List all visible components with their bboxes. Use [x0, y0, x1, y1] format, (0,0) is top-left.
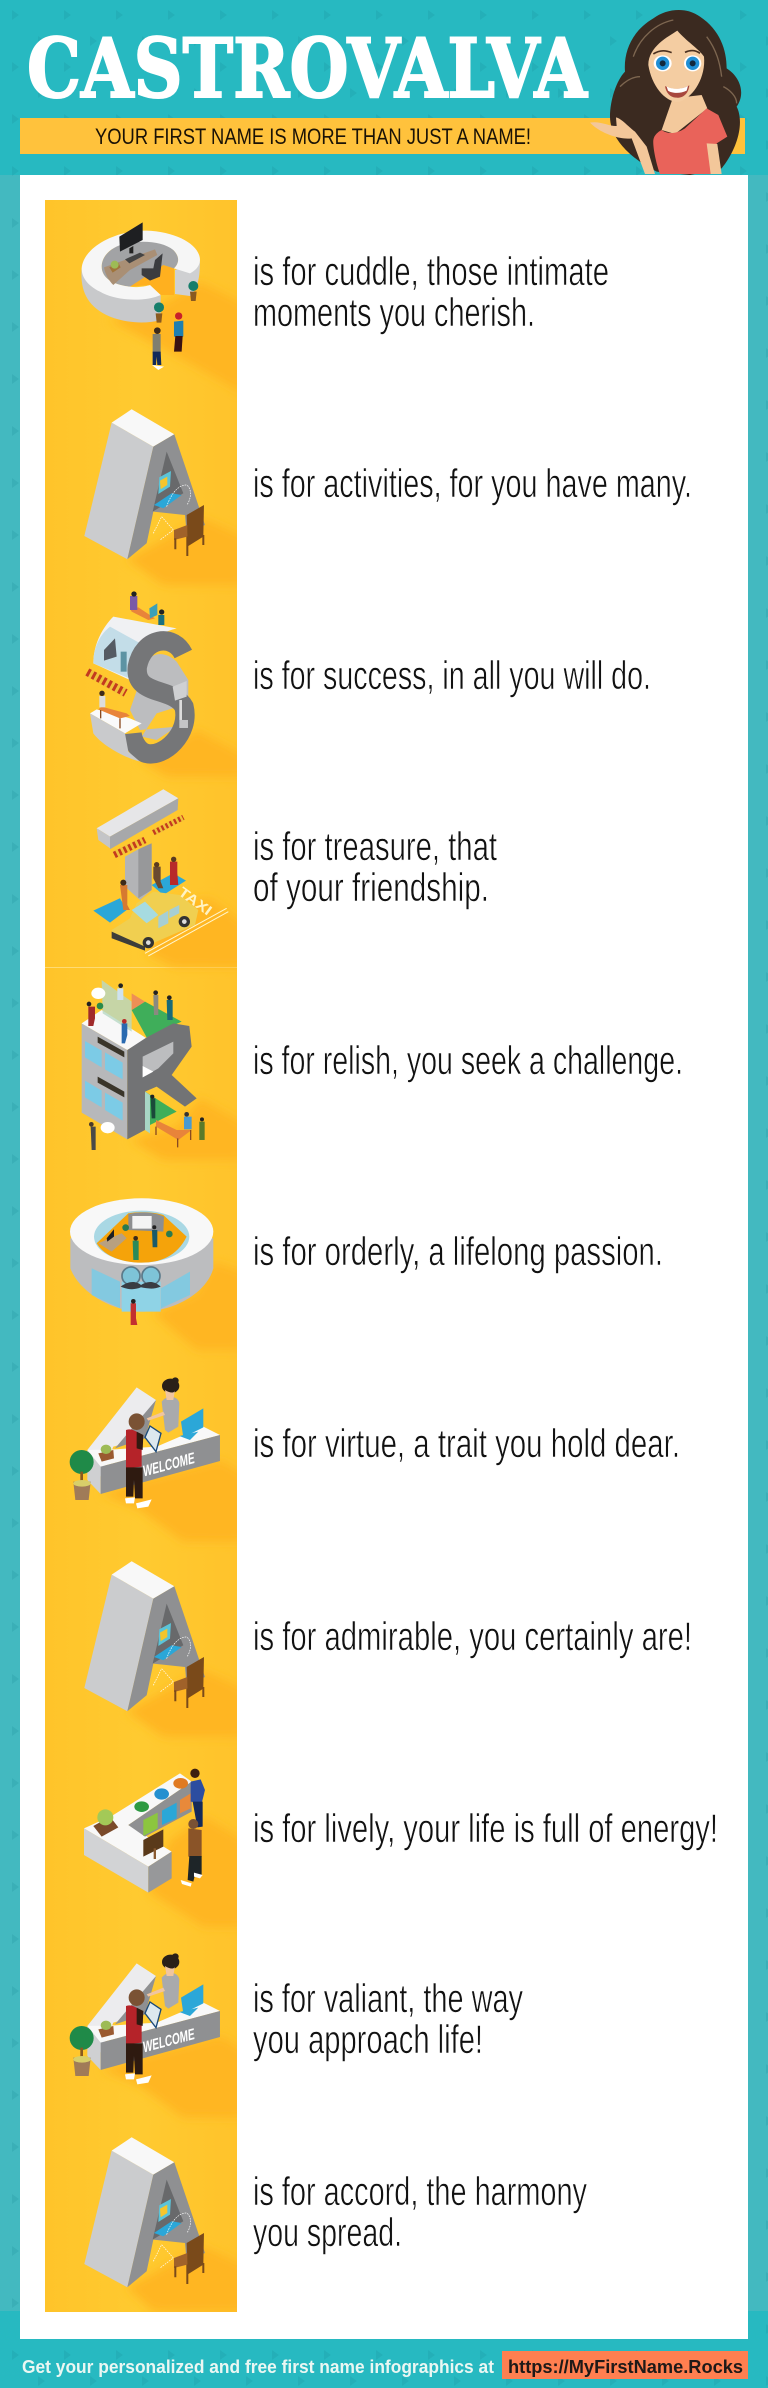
icon: letter V welcome desk [70, 1377, 243, 1542]
icon: woman mascot [590, 10, 741, 175]
icon: letter V welcome desk (valiant) [70, 1953, 243, 2118]
text: A line 3: you spread. [253, 2211, 402, 2255]
text: V line 2 [253, 1977, 523, 2062]
icon: letter V welcome desk: WELCOME [143, 1450, 195, 1481]
title: CASTROVALVA [27, 22, 588, 117]
icon: letter L recycling station [84, 1769, 243, 1927]
icon: letter T taxi stand: TAXI [176, 883, 215, 918]
subtitle banner [20, 118, 745, 154]
text: V line 2: is for valiant, the way [253, 1977, 523, 2021]
icon: letter T taxi stand [93, 789, 243, 967]
icon: letter S offices [84, 591, 243, 777]
icon: letter V welcome desk (valiant): WELCOME [143, 2026, 195, 2057]
text: T line: of your friendship. [253, 866, 489, 910]
icon: letter A desk [84, 409, 243, 585]
footer call to action text: Get your personalized and free first name infographics at [22, 2357, 494, 2377]
text: C line: is for cuddle, those intimate [253, 250, 609, 294]
icon: letter R building [82, 980, 243, 1160]
icon: letter C reception [81, 222, 243, 393]
text: C line [253, 250, 609, 335]
icon: letter A desk (accord) [84, 2137, 243, 2311]
text: A line 3: is for accord, the harmony [253, 2170, 587, 2214]
text: C line: moments you cherish. [253, 291, 535, 335]
footer url button: https://MyFirstName.Rocks [508, 2357, 743, 2377]
text: T line: is for treasure, that [253, 825, 497, 869]
icon: letter O optician [70, 1198, 243, 1350]
icon: letter A desk (admirable) [84, 1561, 243, 1737]
text: A line 3 [253, 2170, 587, 2255]
panel: letter illustration strip [45, 200, 243, 2312]
text: V line 2: you approach life! [253, 2018, 483, 2062]
subtitle banner: YOUR FIRST NAME IS MORE THAN JUST A NAME! [95, 124, 531, 149]
text: T line [253, 825, 497, 910]
footer url button [502, 2351, 748, 2379]
